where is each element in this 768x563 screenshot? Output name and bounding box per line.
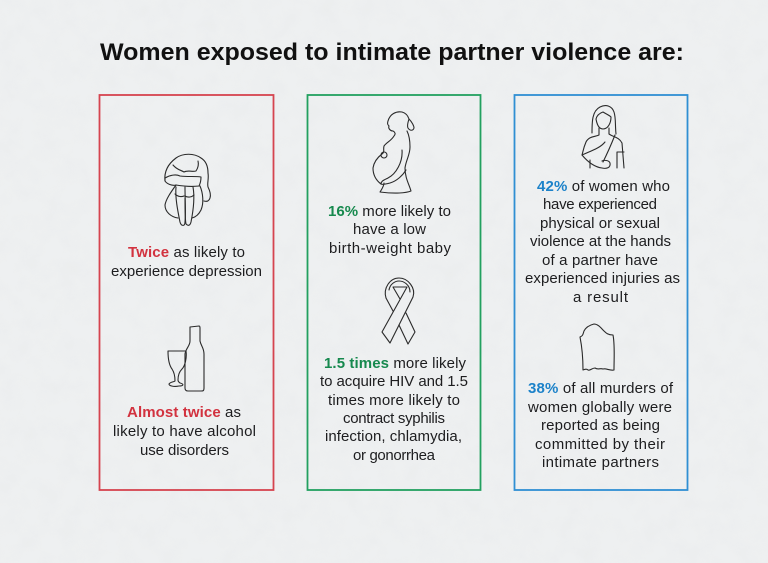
panel: injuries and murders (blue): women globally were [527,399,672,416]
panel: injuries and murders (blue): of a partner have [542,252,658,269]
panel: pregnancy and infection (green): to acquire HIV and 1.5 [320,373,468,390]
panel: pregnancy and infection (green): contract syphilis [343,410,445,427]
text: injuries: 42% of women who [537,178,670,195]
panel: injuries and murders (blue): violence at the hands [530,233,671,250]
panel: mental health and alcohol (red): experience depression [111,263,262,280]
text: murders: 38% of all murders of [528,380,674,397]
text: birth weight: 16% more likely to [328,203,451,220]
panel: pregnancy and infection (green): birth-weight baby [329,240,452,257]
panel: injuries and murders (blue): intimate partners [542,454,659,471]
panel: injuries and murders (blue): committed by their [535,436,665,453]
panel: pregnancy and infection (green): or gonorrhea [353,447,436,464]
icon: woman hugging knees [165,154,210,225]
text: alcohol: Almost twice as [127,404,241,421]
panel: injuries and murders (blue): physical or sexual [540,215,660,232]
panel: pregnancy and infection (green) [308,95,480,490]
panel: pregnancy and infection (green): have a low [353,221,426,238]
panel: injuries and murders (blue): reported as being [541,417,660,434]
text: depression: Twice as likely to [128,244,245,261]
panel: mental health and alcohol (red): likely to have alcohol [113,423,256,440]
panel: injuries and murders (blue): experienced injuries as [525,270,680,287]
panel: mental health and alcohol (red): use disorders [140,442,229,459]
panel: injuries and murders (blue): a result [573,289,629,306]
icon: woman with arm sling [582,106,624,168]
icon: awareness ribbon [382,278,415,344]
icon: gravestone [580,324,614,370]
panel: injuries and murders (blue) [514,95,688,490]
title: Women exposed to intimate partner violence are: [100,39,684,66]
panel: pregnancy and infection (green): infection, chlamydia, [325,428,462,445]
text: HIV and infections: 1.5 times more likely [324,355,466,372]
panel: mental health and alcohol (red) [100,95,274,490]
panel: injuries and murders (blue): have experienced [543,196,657,213]
panel: pregnancy and infection (green): times more likely to [328,392,460,409]
icon: wine bottle and glass [168,326,204,391]
icon: pregnant woman [373,112,414,193]
